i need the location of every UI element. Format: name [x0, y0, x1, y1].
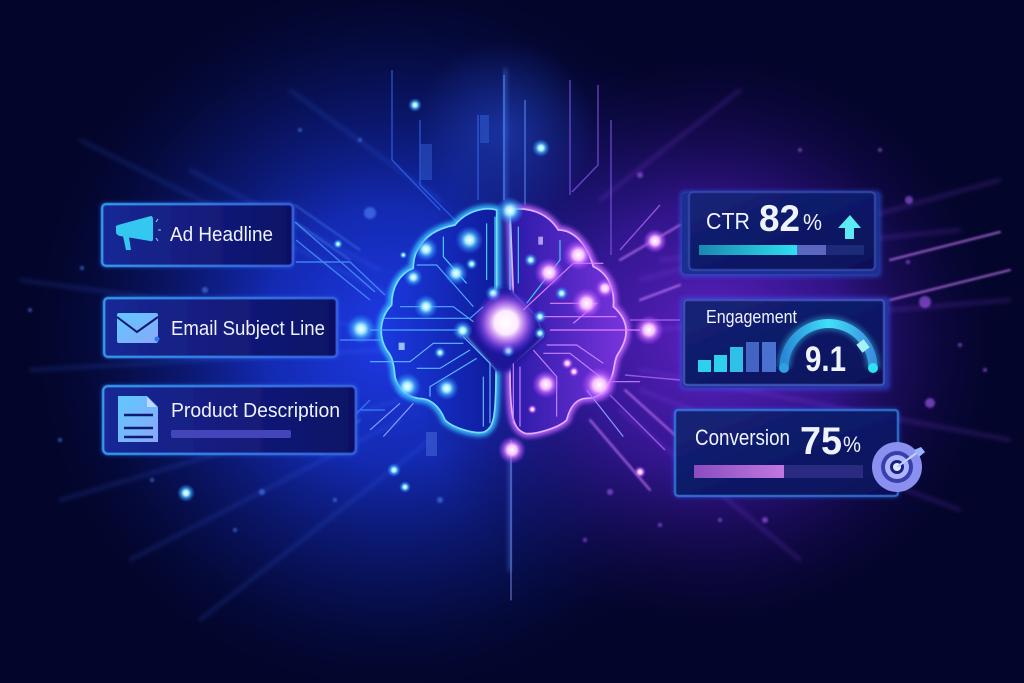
value: 82 [759, 198, 800, 239]
value: 75 [800, 420, 842, 463]
background light rays [20, 70, 1010, 620]
icon: document [118, 396, 158, 442]
circuit lines above and below brain [295, 70, 680, 456]
value: 9.1 [805, 340, 846, 379]
label: Conversion [695, 425, 790, 450]
percent sign: % [803, 209, 822, 235]
background particles [28, 98, 987, 542]
label: Ad Headline [170, 224, 273, 246]
glowing nodes [393, 197, 617, 414]
line through core [370, 327, 640, 333]
panel: CTR metric [680, 191, 881, 277]
label: Engagement [706, 307, 797, 327]
icon: megaphone [116, 216, 161, 250]
brain [370, 197, 640, 437]
icon: target [872, 442, 925, 492]
progress bar [171, 430, 291, 438]
panel: Product Description [102, 385, 357, 455]
percent sign: % [843, 432, 861, 457]
progress bar [694, 465, 863, 478]
panel: Conversion metric [674, 409, 925, 497]
icon: envelope [117, 313, 160, 343]
label: CTR [706, 208, 750, 234]
label: Product Description [171, 400, 340, 422]
left hemisphere [381, 209, 497, 433]
gauge [779, 324, 878, 373]
central core area [463, 288, 545, 372]
panel: Ad Headline [101, 203, 294, 267]
progress bar [699, 245, 864, 255]
label: Email Subject Line [171, 318, 325, 340]
right hemisphere [510, 209, 626, 434]
bar chart [698, 342, 776, 372]
brain glow [381, 209, 626, 434]
panel: Email Subject Line [103, 297, 338, 358]
circuit traces in brain [370, 217, 640, 437]
panel: Engagement metric [680, 297, 890, 390]
icon: up arrow [838, 215, 861, 239]
central glowing core [473, 289, 539, 356]
